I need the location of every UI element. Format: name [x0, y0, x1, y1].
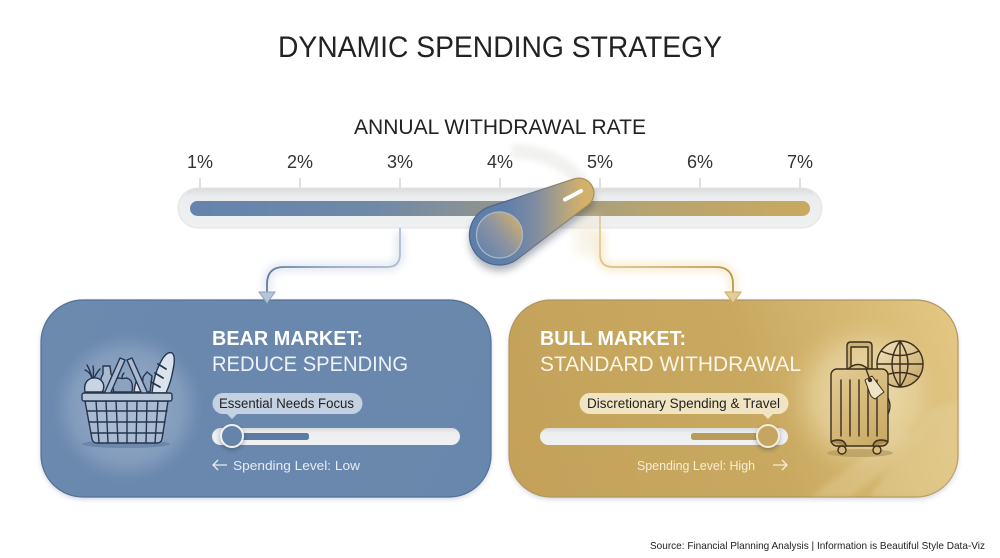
bear spending level: Spending Level: Low: [233, 458, 361, 473]
title: DYNAMIC SPENDING STRATEGY: [278, 31, 722, 64]
bear heading: BEAR MARKET:: [212, 327, 363, 350]
bull pill label: [580, 393, 788, 419]
bear pill label: [213, 393, 363, 419]
bull spending slider: [540, 425, 788, 447]
bear pill label: Essential Needs Focus: [219, 396, 354, 411]
bull heading: BULL MARKET:: [540, 327, 686, 350]
connector: 5% to bull market: [600, 216, 741, 303]
motion trail: [512, 151, 600, 254]
icon: grocery basket: [49, 329, 205, 485]
dial knob: [469, 178, 594, 271]
bear spending slider: [212, 425, 460, 447]
bear heading: [212, 327, 408, 376]
withdrawal rate track: [178, 188, 822, 228]
bull heading: [540, 327, 801, 376]
scale tick labels: 4%: [487, 152, 513, 172]
scale tick marks: [200, 178, 800, 189]
scale tick labels: 7%: [787, 152, 813, 172]
bull spending level: Spending Level: High: [637, 458, 755, 473]
panel light streaks: [810, 400, 958, 497]
scale tick labels: [187, 152, 813, 172]
panel: bull market: [509, 300, 958, 497]
scale tick labels: 2%: [287, 152, 313, 172]
scale tick labels: 5%: [587, 152, 613, 172]
scale heading: ANNUAL WITHDRAWAL RATE: [354, 116, 646, 139]
bull heading: STANDARD WITHDRAWAL: [540, 352, 801, 376]
scale tick labels: 3%: [387, 152, 413, 172]
bull pill label: Discretionary Spending & Travel: [587, 396, 780, 411]
icon: suitcase and globe: [781, 313, 949, 481]
scale tick labels: 6%: [687, 152, 713, 172]
connector: 3% to bear market: [259, 228, 400, 303]
scale tick labels: 1%: [187, 152, 213, 172]
bear heading: REDUCE SPENDING: [212, 352, 408, 376]
panel: bear market: [41, 300, 491, 497]
source note: Source: Financial Planning Analysis | Information is Beautiful Style Data-Viz: [650, 540, 985, 552]
